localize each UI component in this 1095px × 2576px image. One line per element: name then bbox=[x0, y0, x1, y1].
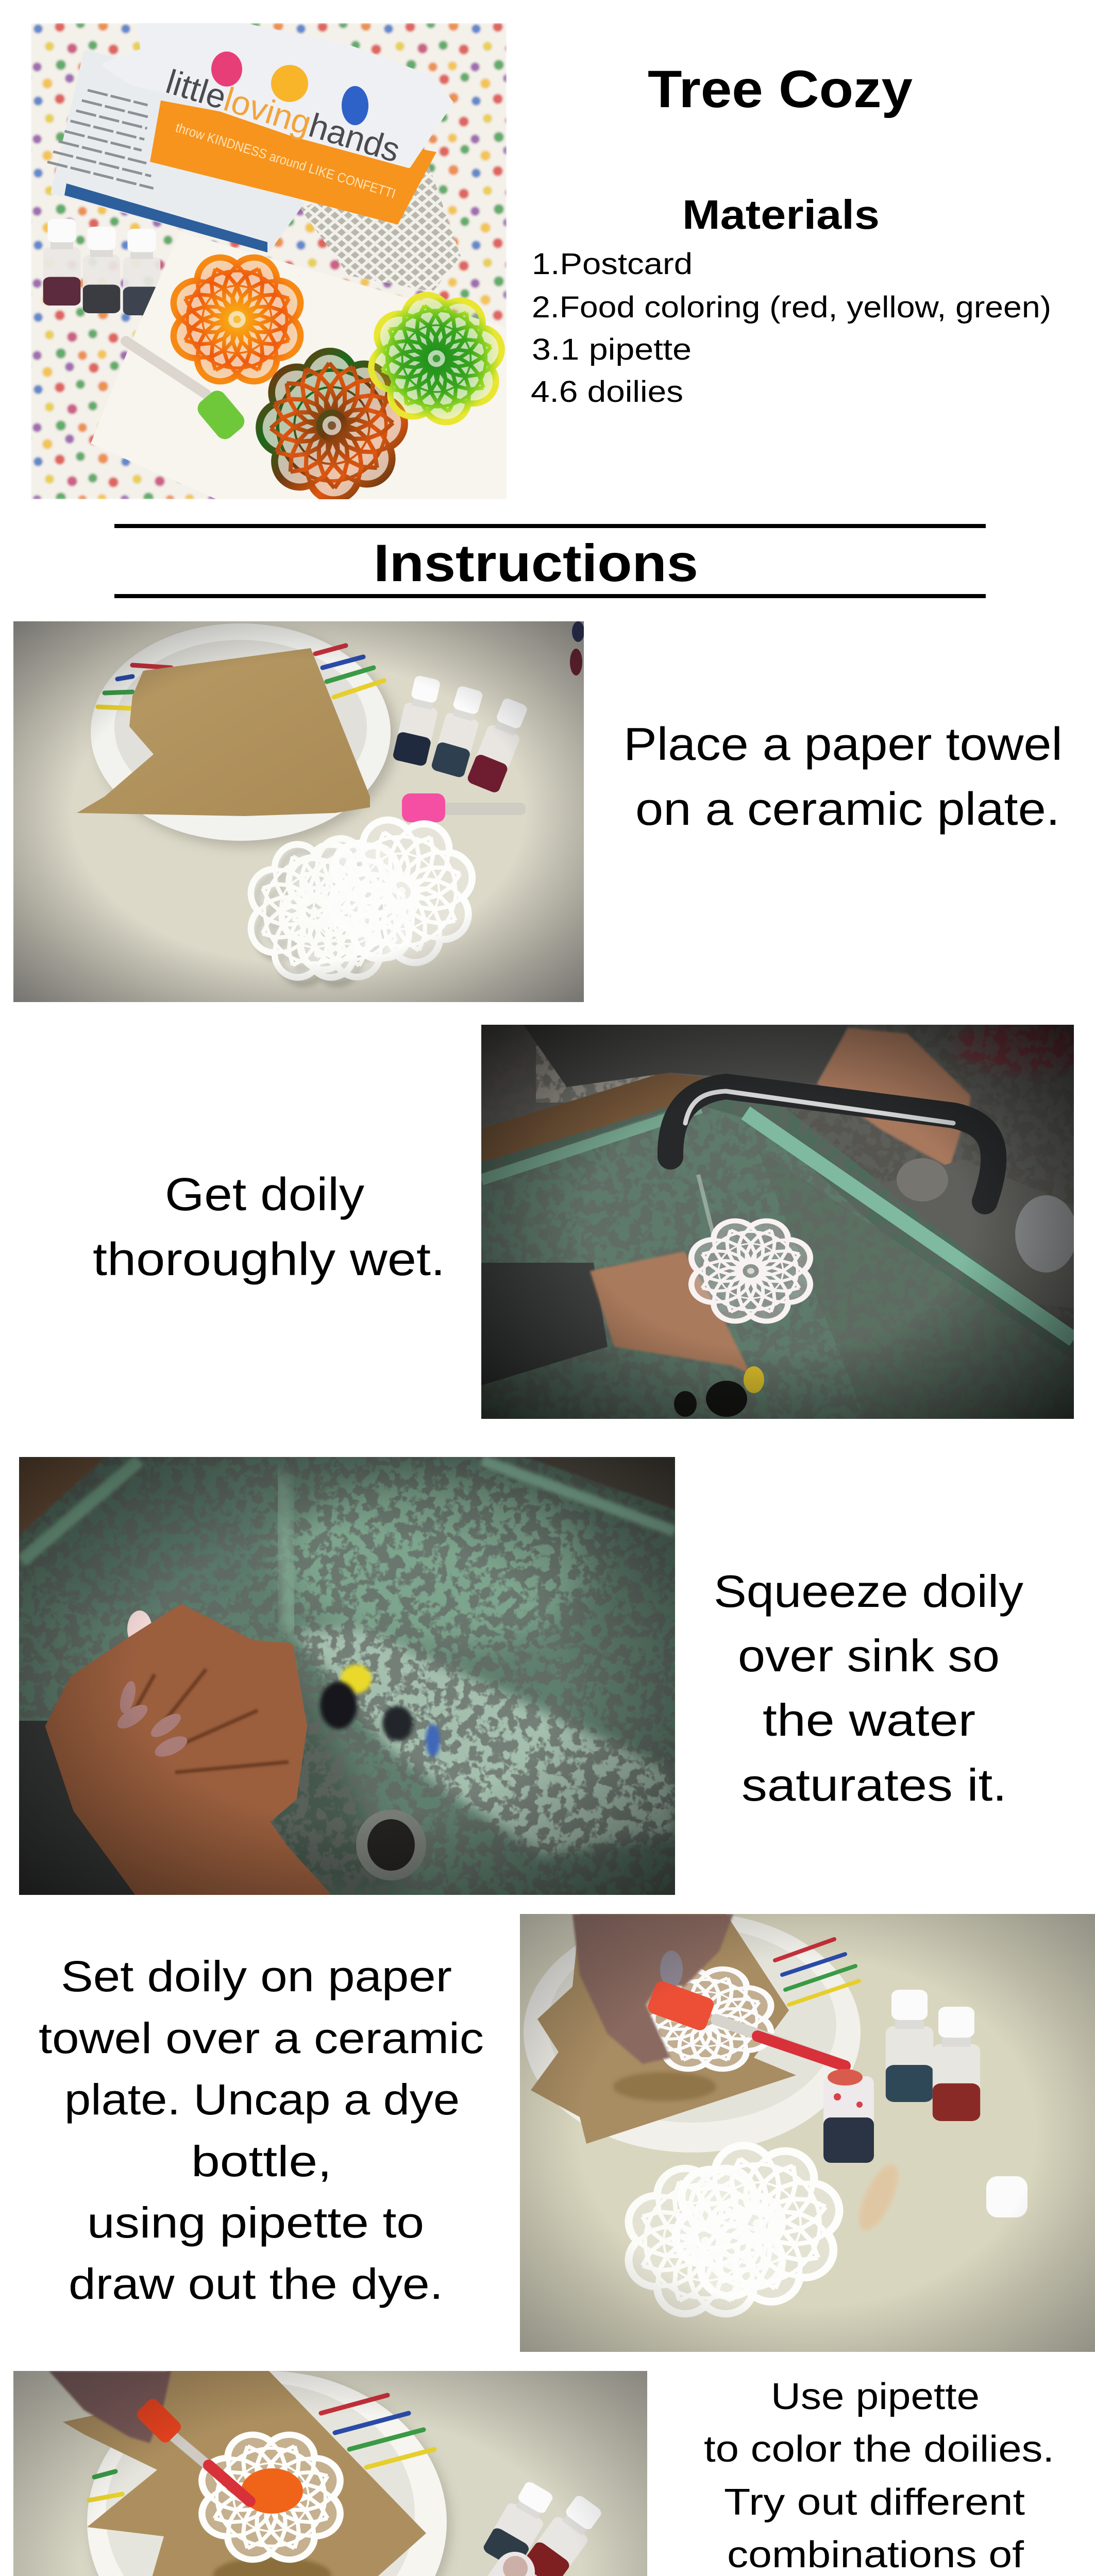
white doilies bbox=[251, 815, 477, 987]
sink rims bbox=[21, 1460, 675, 1633]
text: step 2 bbox=[93, 1169, 445, 1285]
faucet bbox=[670, 1087, 993, 1201]
dye bottles bbox=[392, 674, 532, 794]
open dye bottle bbox=[823, 2069, 874, 2163]
paper towel bbox=[91, 232, 507, 499]
text: step 2: thoroughly wet. bbox=[93, 1234, 445, 1285]
white logo bag bbox=[105, 24, 450, 170]
hand bbox=[572, 1914, 733, 2064]
drain bbox=[356, 1809, 426, 1880]
faucet base and knobs bbox=[880, 1158, 1077, 1309]
text: step 5: combinations of bbox=[727, 2534, 1024, 2575]
pink pipette bbox=[402, 793, 526, 822]
text: step 5: Use pipette bbox=[771, 2376, 980, 2417]
title: Tree Cozy bbox=[648, 60, 913, 118]
pipette bbox=[134, 2396, 250, 2501]
sleeve bbox=[19, 1721, 140, 1895]
squeezing hand bbox=[49, 1608, 327, 1895]
crumpled white doilies bbox=[300, 158, 461, 292]
kraft paper towel bbox=[63, 2371, 426, 2576]
photo: step 5 coloring doily with pipette bbox=[13, 2371, 647, 2576]
materials list: 3.1 pipette bbox=[532, 333, 692, 366]
doily with orange dye bbox=[202, 2435, 340, 2560]
white logo bag: littlelovinghands bbox=[162, 62, 405, 170]
materials list: 2.Food coloring (red, yellow, green) bbox=[532, 291, 1051, 324]
paint splotches bbox=[674, 1366, 764, 1417]
materials list: 1.Postcard bbox=[532, 247, 693, 281]
photo: step 2 wetting doily under faucet bbox=[481, 1025, 1074, 1419]
text: step 2: Get doily bbox=[165, 1169, 364, 1221]
text: step 4: draw out the dye. bbox=[69, 2260, 443, 2308]
doily pieces bbox=[127, 1611, 267, 1801]
doily on paper towel bbox=[640, 1969, 771, 2069]
text: step 1: Place a paper towel bbox=[624, 719, 1063, 770]
bottle cap bbox=[986, 2176, 1027, 2217]
pipette bbox=[126, 341, 248, 443]
text: step 5: to color the doilies. bbox=[704, 2429, 1054, 2470]
text: step 4: Set doily on paper bbox=[61, 1952, 452, 2001]
ceramic plate bbox=[91, 623, 396, 846]
pipette bbox=[646, 1979, 845, 2066]
wet stain bbox=[213, 2557, 331, 2576]
orange envelope: throw KINDNESS around LIKE CONFETTI bbox=[174, 120, 398, 201]
text: step 3: Squeeze doily bbox=[714, 1566, 1023, 1617]
lower hand bbox=[590, 1251, 751, 1375]
upper hand bbox=[817, 1028, 970, 1168]
kraft paper towel bbox=[77, 648, 370, 816]
hand bbox=[49, 2371, 171, 2443]
capped dye bottles bbox=[886, 1990, 980, 2121]
ceramic plate bbox=[524, 1912, 861, 2153]
text: step 3: saturates it. bbox=[742, 1759, 1007, 1810]
postcard bbox=[47, 50, 304, 252]
orange envelope bbox=[150, 100, 436, 225]
lower sleeve bbox=[481, 1263, 608, 1385]
white doilies bbox=[629, 2138, 847, 2314]
kraft paper towel bbox=[531, 1914, 796, 2144]
text: step 1: on a ceramic plate. bbox=[635, 784, 1060, 835]
sink basin bbox=[481, 1025, 1074, 1419]
text: step 5 bbox=[704, 2376, 1054, 2576]
heading: materials: Materials bbox=[682, 192, 880, 238]
text: step 3 bbox=[714, 1566, 1023, 1810]
text: step 4: bottle, bbox=[191, 2137, 332, 2185]
dyed doilies bbox=[174, 258, 510, 516]
text: step 4 bbox=[39, 1952, 484, 2308]
text: step 3: over sink so bbox=[738, 1630, 1000, 1681]
paint spots bbox=[320, 1665, 440, 1757]
photo: step 3 squeezing doily over sink bbox=[19, 1457, 675, 1895]
photo: step 1 plate, paper towel, bottles and doilies bbox=[13, 621, 584, 1002]
text: step 5: Try out different bbox=[724, 2482, 1025, 2523]
wooden edge bbox=[481, 1073, 712, 1162]
text: step 4: plate. Uncap a dye bbox=[64, 2075, 460, 2124]
materials list: 4.6 doilies bbox=[531, 375, 683, 409]
dye bottles bbox=[475, 2478, 607, 2576]
text: step 1 bbox=[624, 719, 1063, 835]
heading: instructions: Instructions bbox=[374, 534, 698, 592]
upper sleeve bbox=[524, 1025, 848, 1087]
photo: step 4 drawing dye with pipette bbox=[520, 1914, 1095, 2352]
white doily bbox=[692, 1221, 810, 1321]
text: step 4: using pipette to bbox=[87, 2198, 424, 2247]
text: step 3: the water bbox=[763, 1694, 975, 1745]
photo: kit contents on polka dot paper bbox=[31, 23, 507, 499]
materials list bbox=[531, 247, 1051, 409]
dye bottles bbox=[43, 219, 160, 315]
text: step 4: towel over a ceramic bbox=[39, 2014, 484, 2062]
ceramic plate bbox=[87, 2371, 450, 2576]
